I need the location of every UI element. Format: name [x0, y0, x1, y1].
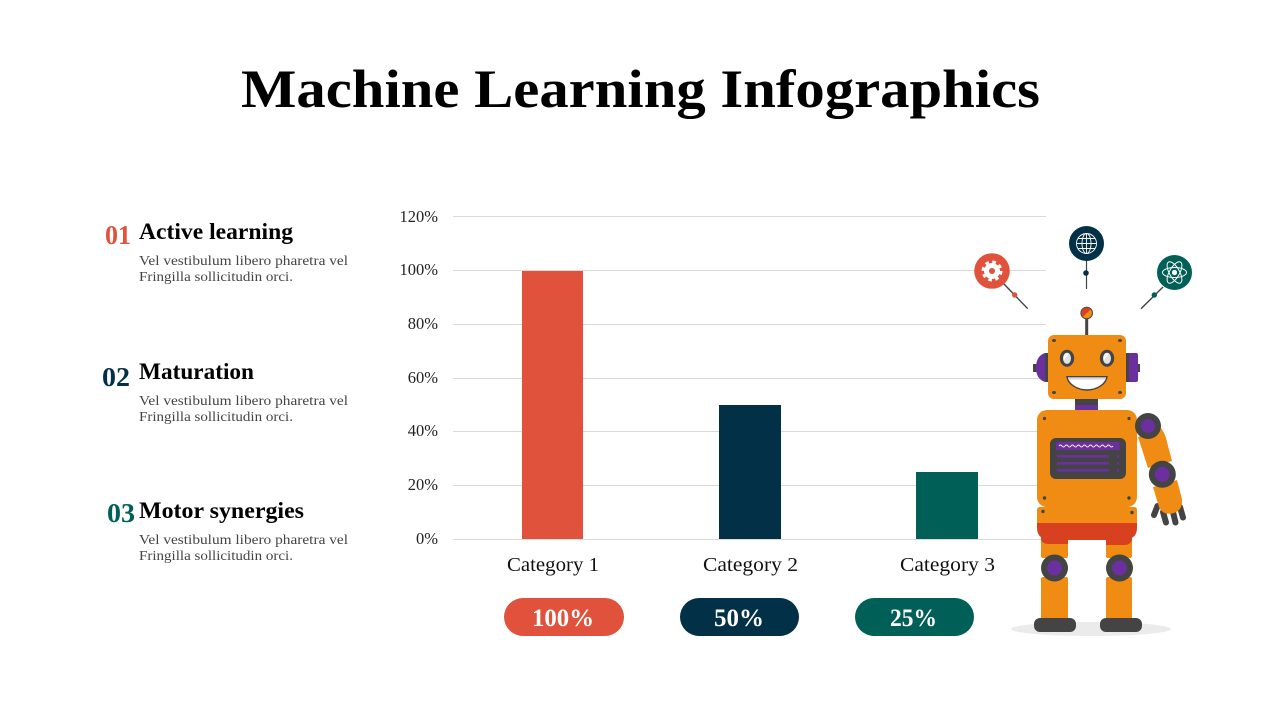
icon: atom callout [1141, 255, 1192, 309]
pill: 100% [504, 598, 624, 636]
pill: 25%: 25% [890, 605, 937, 632]
robot eyes [1060, 350, 1114, 367]
bar: category 1 [522, 271, 583, 539]
number 01: 01 [105, 220, 131, 250]
text block: maturation: Vel vestibulum libero pharetra vel [139, 393, 348, 408]
icon: gear callout [974, 253, 1028, 309]
robot ears [1033, 353, 1140, 382]
robot chest screen [1050, 438, 1126, 479]
y axis labels [400, 207, 438, 548]
heading: active learning: Active learning [139, 219, 294, 244]
panel: motor synergies [107, 498, 348, 563]
y axis labels: 40% [408, 421, 438, 440]
robot arm [1135, 413, 1183, 522]
text block: motor synergies: Fringilla sollicitudin orci. [139, 548, 293, 563]
pill: 50%: 50% [714, 605, 764, 632]
robot body [1037, 410, 1137, 540]
text block: maturation [139, 393, 348, 424]
panel: maturation [102, 359, 348, 424]
bar: category 3 [916, 472, 978, 539]
ground shadow [1011, 622, 1171, 636]
category labels: Category 2 [703, 554, 798, 576]
pill: 50% [680, 598, 799, 636]
y axis labels: 80% [408, 314, 438, 333]
heading: maturation: Maturation [139, 359, 254, 384]
text block: motor synergies: Vel vestibulum libero pharetra vel [139, 532, 348, 547]
category labels [507, 554, 995, 576]
pill: 25% [855, 598, 974, 636]
icon: globe callout [1069, 226, 1104, 289]
number 02: 02 [102, 362, 130, 392]
category labels: Category 1 [507, 554, 599, 576]
y axis labels: 120% [400, 207, 438, 226]
y axis labels: 20% [408, 475, 438, 494]
title: Machine Learning Infographics [241, 59, 1040, 119]
text block: motor synergies [139, 532, 348, 563]
number 03: 03 [107, 498, 135, 528]
text block: active learning: Vel vestibulum libero pharetra vel [139, 253, 348, 268]
robot head [1048, 335, 1126, 399]
text block: active learning [139, 253, 348, 284]
robot neck [1075, 398, 1098, 411]
robot legs [1034, 535, 1142, 632]
robot illustration [1011, 307, 1183, 636]
robot mouth [1067, 377, 1107, 390]
category labels: Category 3 [900, 554, 995, 576]
text block: active learning: Fringilla sollicitudin orci. [139, 269, 293, 284]
heading: motor synergies: Motor synergies [139, 498, 304, 523]
y axis labels: 60% [408, 368, 438, 387]
robot antenna [1081, 307, 1092, 336]
bar: category 2 [719, 405, 781, 539]
panel: active learning [105, 219, 348, 284]
pill: 100%: 100% [532, 605, 594, 632]
bar chart [400, 207, 1046, 576]
y axis labels: 100% [400, 260, 438, 279]
y axis labels: 0% [416, 529, 438, 548]
text block: maturation: Fringilla sollicitudin orci. [139, 409, 293, 424]
